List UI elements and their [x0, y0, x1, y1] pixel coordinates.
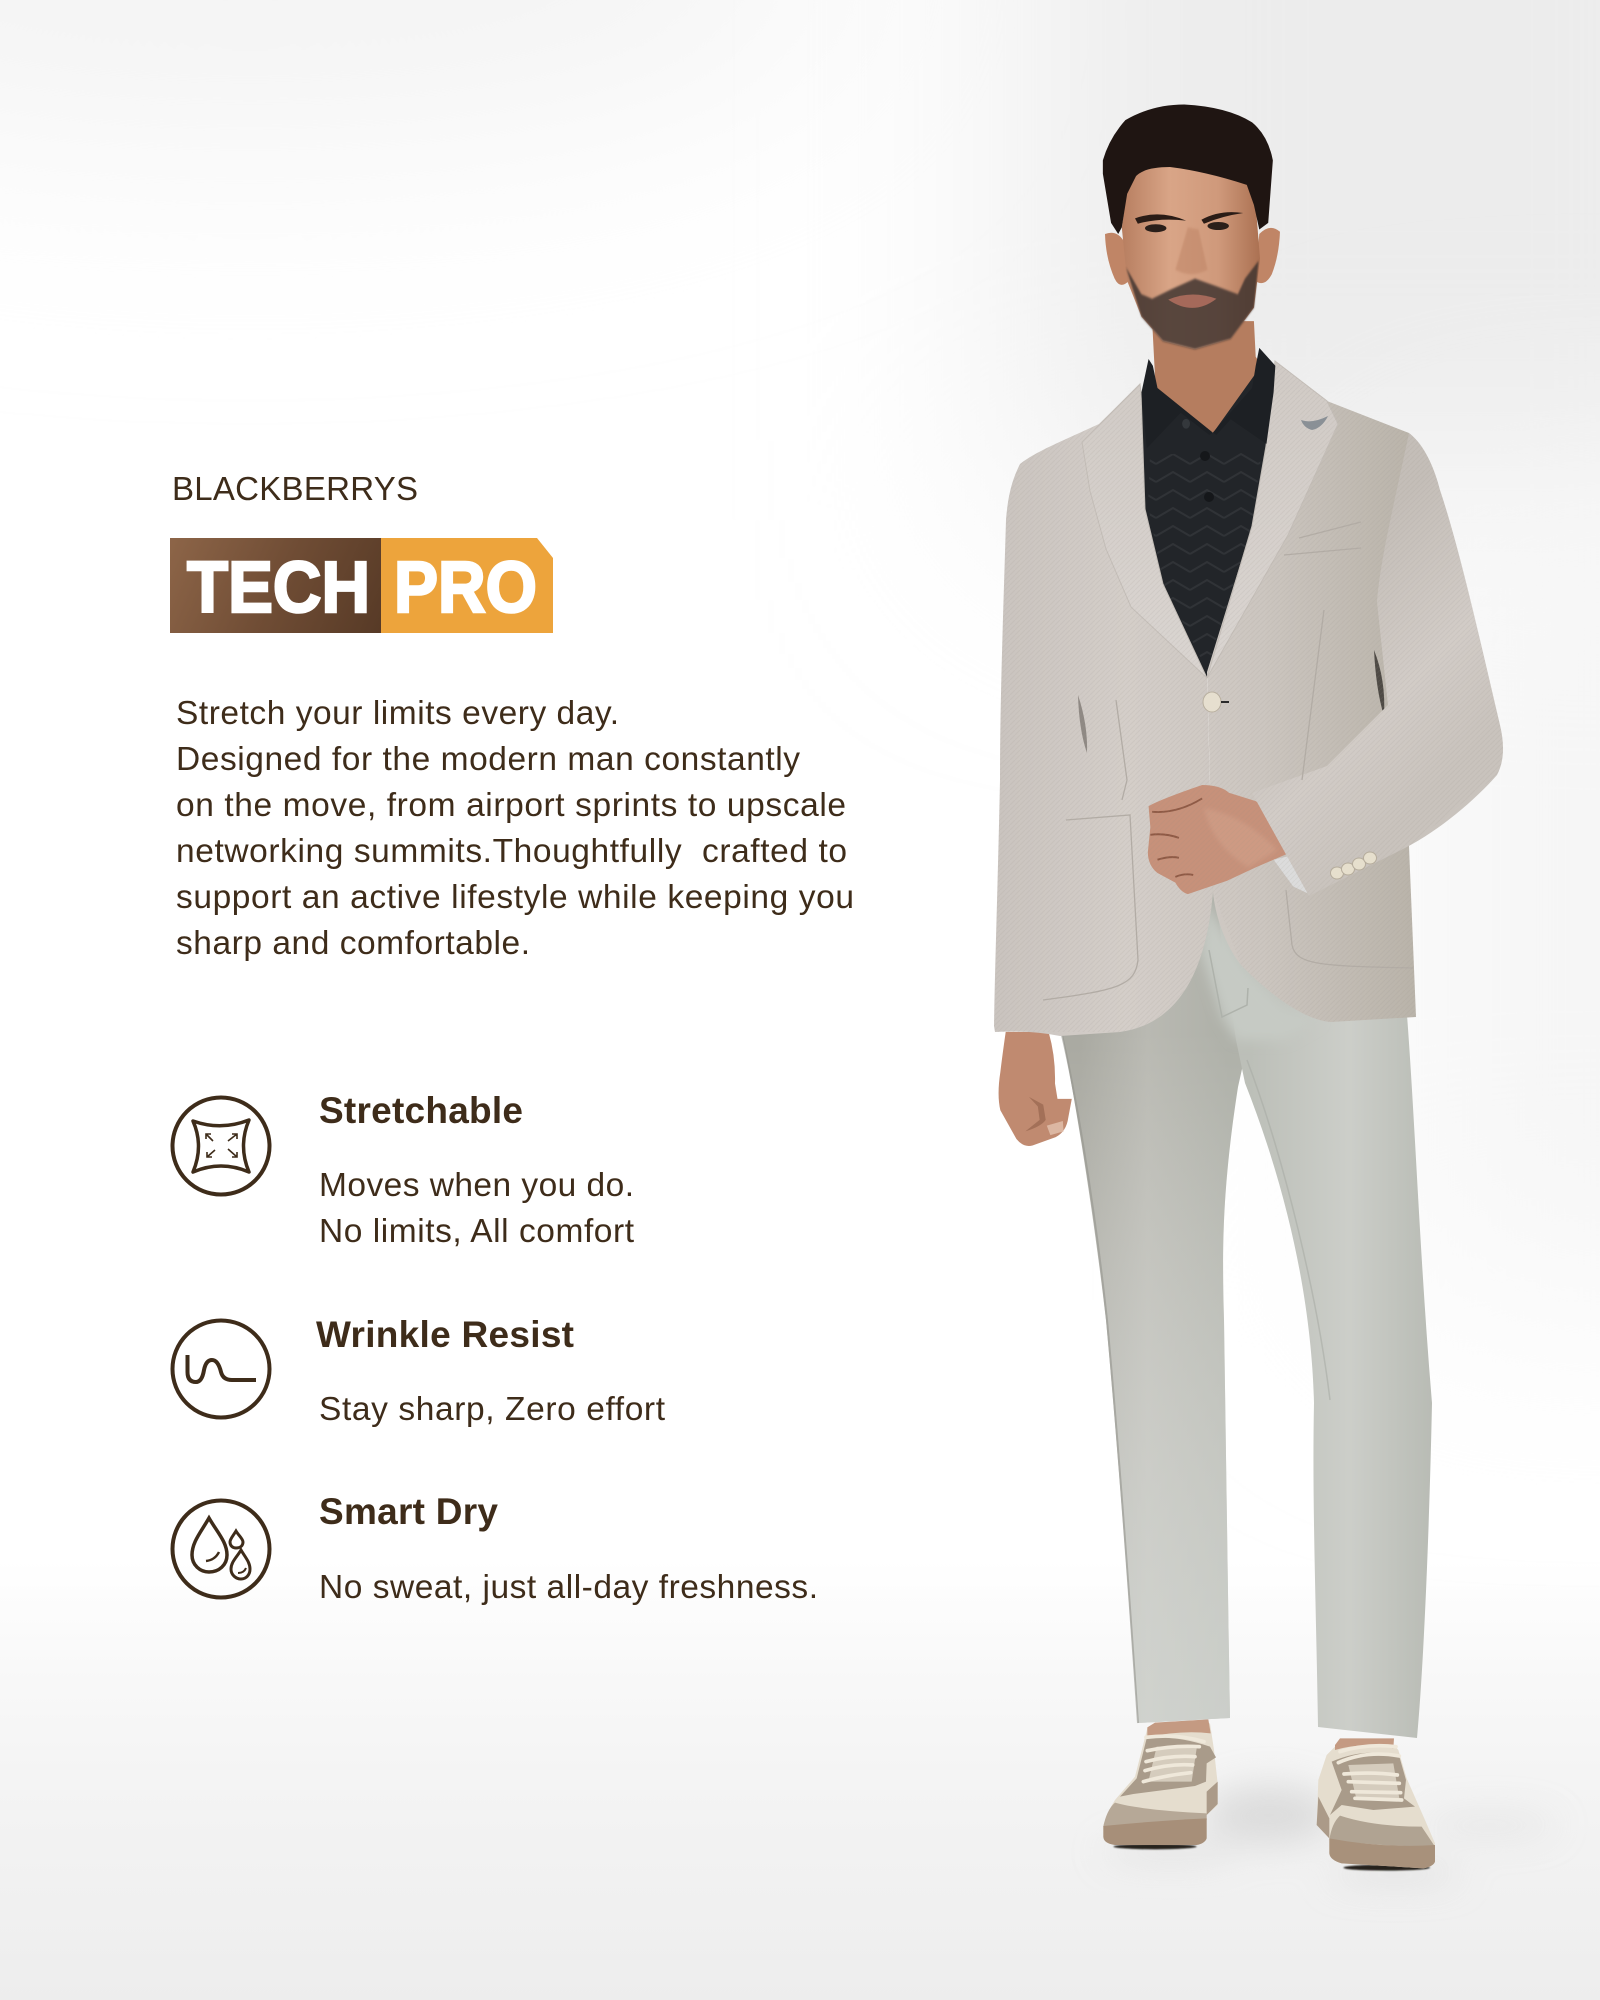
beard	[1126, 261, 1259, 349]
neck	[1152, 321, 1263, 437]
eyes	[1145, 222, 1229, 232]
left trouser leg	[1059, 880, 1250, 1723]
intro paragraph: support an active lifestyle while keeping you	[176, 879, 854, 916]
right trouser leg	[1200, 880, 1432, 1738]
left sneaker	[1103, 1719, 1218, 1849]
floor shadows	[1100, 1785, 1560, 1883]
blazer left panel and sleeve	[994, 384, 1213, 1036]
icon: smooth wave	[172, 1320, 270, 1418]
trousers	[1059, 880, 1432, 1738]
arm gap shadows	[1078, 650, 1384, 753]
logo: Tech Pro badge: PRO	[394, 548, 537, 628]
intro paragraph	[176, 695, 854, 962]
polo shirt	[1141, 366, 1275, 678]
hair	[1103, 105, 1273, 234]
eyebrows	[1135, 212, 1243, 224]
blazer right sleeve	[1252, 433, 1503, 896]
logo: Tech Pro badge: TECH	[187, 548, 370, 628]
icon: water drops	[172, 1500, 270, 1598]
brand name: BLACKBERRYS	[172, 470, 418, 507]
feature: Wrinkle Resist	[172, 1314, 666, 1428]
description: Smart Dry: No sweat, just all-day freshness.	[319, 1569, 818, 1606]
sneakers	[1103, 1719, 1435, 1871]
feature: Smart Dry	[172, 1491, 818, 1606]
blazer	[994, 361, 1503, 1036]
model figure	[994, 105, 1560, 1883]
description: Stretchable: No limits, All comfort	[319, 1213, 635, 1250]
icon: stretch fabric	[172, 1098, 270, 1194]
description: Wrinkle Resist: Stay sharp, Zero effort	[319, 1391, 666, 1428]
weave texture	[994, 361, 1503, 1032]
lapels	[1082, 361, 1338, 678]
head	[1103, 105, 1280, 349]
intro paragraph: sharp and comfortable.	[176, 925, 530, 962]
intro paragraph: networking summits.Thoughtfully crafted to	[176, 833, 847, 870]
sleeve buttons	[1330, 852, 1376, 879]
blazer front button	[1203, 692, 1229, 712]
blazer right panel	[1207, 361, 1425, 1022]
shirt collar	[1141, 348, 1275, 448]
logo: Tech Pro badge	[170, 538, 553, 633]
nose	[1175, 227, 1207, 274]
description: Stretchable	[319, 1167, 635, 1250]
ears	[1105, 228, 1280, 285]
intro paragraph: Stretch your limits every day.	[176, 695, 619, 732]
face	[1122, 160, 1260, 349]
feature: Stretchable	[172, 1090, 635, 1250]
blazer seams and pockets	[1043, 522, 1413, 1000]
right hand and shirt cuff	[1148, 785, 1309, 894]
heading: Smart Dry: Smart Dry	[319, 1491, 498, 1532]
heading: Wrinkle Resist: Wrinkle Resist	[316, 1314, 574, 1355]
heading: Stretchable: Stretchable	[319, 1090, 523, 1131]
lips	[1168, 294, 1216, 308]
description: Stretchable: Moves when you do.	[319, 1167, 634, 1204]
right sneaker	[1317, 1738, 1435, 1871]
left hand	[999, 1032, 1072, 1146]
lapel pin	[1301, 416, 1328, 430]
intro paragraph: on the move, from airport sprints to upscale	[176, 787, 846, 824]
intro paragraph: Designed for the modern man constantly	[176, 741, 800, 778]
